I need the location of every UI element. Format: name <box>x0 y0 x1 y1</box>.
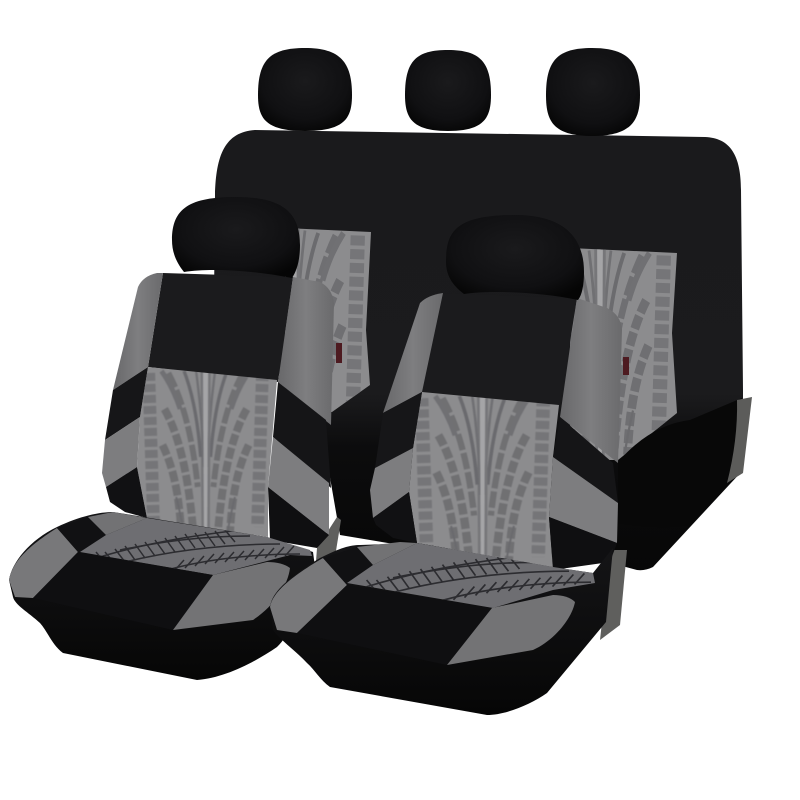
panel: right seat side flap <box>600 550 627 640</box>
panel: right cushion small grey <box>357 542 417 565</box>
panel: left cushion small grey <box>88 512 147 535</box>
panel: left cushion base <box>9 512 315 680</box>
panel: left backrest tyre tread <box>137 367 277 537</box>
panel: left cushion black band <box>33 552 213 630</box>
panel: left cushion black square <box>57 517 106 552</box>
front right seat <box>270 215 629 715</box>
panel: right backrest top <box>422 293 577 405</box>
panel: right seat left grey lower <box>370 448 413 518</box>
panel: rear backrest and base <box>214 130 743 570</box>
icon: right seat red tag <box>623 357 629 375</box>
panel: right cushion grey left <box>270 558 347 633</box>
panel: right seat left grey upper <box>383 293 443 413</box>
panel: right seat right grey lower <box>549 457 618 543</box>
rear bench seat <box>214 48 752 570</box>
panel: left seat left black lower <box>106 467 147 518</box>
panel: rear right tyre-tread insert <box>570 248 677 460</box>
panel: left cushion grey right <box>173 562 290 630</box>
panel: right seat left black band <box>375 392 422 468</box>
panel: rear side flap <box>727 397 752 483</box>
panel: right seat left black lower <box>373 492 417 543</box>
panel: left cushion tyre tread <box>80 518 312 575</box>
panel: left seat right black lower <box>268 487 329 548</box>
illustration: five-piece car seat cover set <box>9 48 752 715</box>
panel: right backrest tyre tread <box>409 392 559 567</box>
panel: left seat right grey upper <box>278 277 334 425</box>
panel: right seat right black lower <box>549 517 617 570</box>
panel: left seat right grey lower <box>268 437 329 535</box>
right front headrest <box>446 215 584 300</box>
panel: right seat right grey upper <box>560 298 622 463</box>
panel: rear left tyre-tread insert <box>285 228 371 412</box>
panel: left seat side flap <box>315 517 341 575</box>
rear headrest left <box>258 48 352 131</box>
panel: right seat right black band <box>553 417 618 503</box>
rear headrest right <box>546 48 640 136</box>
front left seat <box>9 197 342 680</box>
panel: right cushion black square <box>323 547 373 585</box>
panel: left backrest top <box>148 273 293 382</box>
panel: right cushion base <box>270 543 613 715</box>
panel: right cushion tyre tread <box>347 543 595 608</box>
panel: left seat left grey lower <box>102 417 140 487</box>
rear base shadow curve <box>618 398 743 527</box>
panel: left seat left black band <box>105 367 148 440</box>
icon: left seat red tag <box>336 343 342 363</box>
panel: left seat right black band <box>273 382 331 488</box>
left front headrest <box>172 197 300 278</box>
panel: right cushion black band <box>297 585 492 665</box>
rear headrest middle <box>405 50 491 131</box>
panel: left cushion grey left <box>9 528 78 598</box>
panel: right cushion grey right <box>447 595 575 665</box>
panel: left seat left grey upper <box>113 273 163 390</box>
